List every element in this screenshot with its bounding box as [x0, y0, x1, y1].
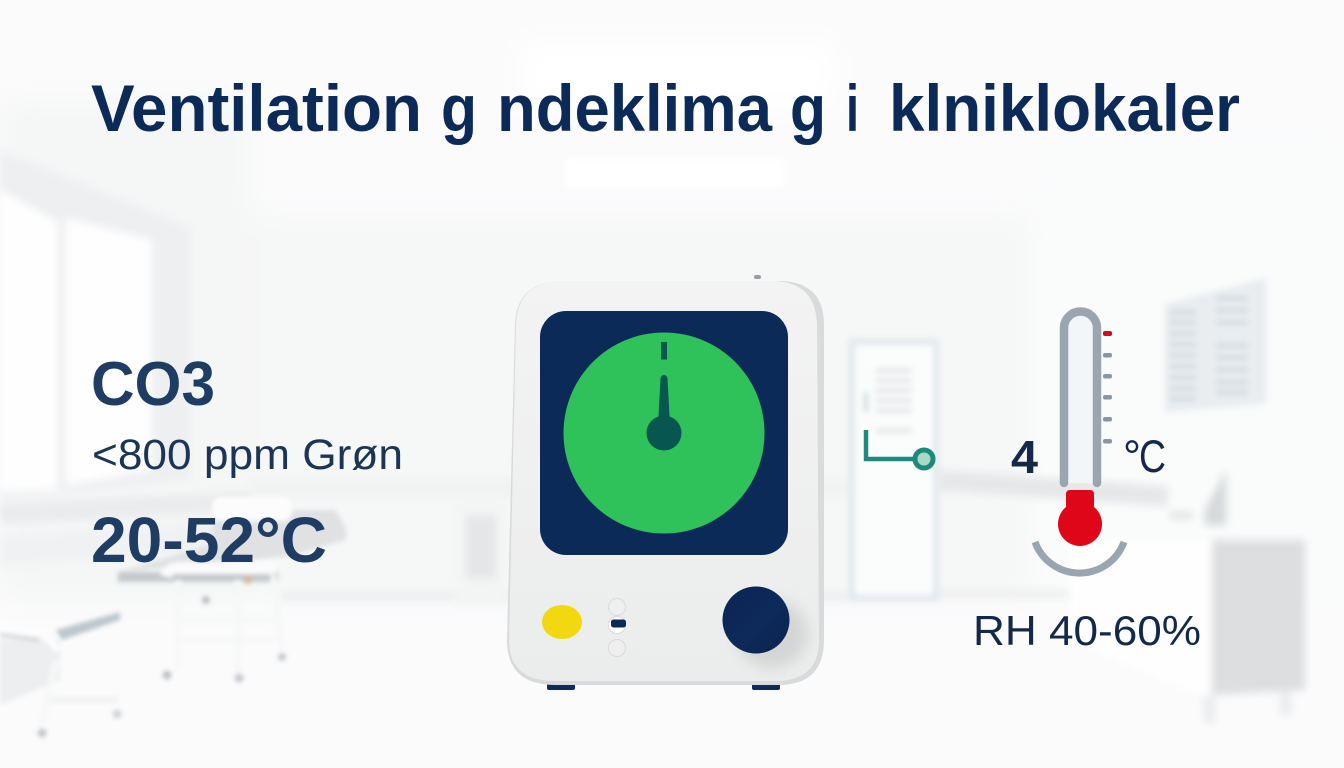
title	[91, 71, 1240, 145]
ceiling light	[565, 158, 785, 188]
thermometer tube	[1064, 312, 1097, 483]
temperature unit: °C: C	[1139, 431, 1166, 482]
gauge tick	[661, 342, 667, 360]
temperature label left: 4: 4	[1011, 431, 1038, 483]
temperature unit: °C	[1123, 431, 1166, 482]
gauge hub	[646, 416, 682, 450]
icon: thermometer	[1035, 312, 1124, 573]
knob shadow	[736, 600, 808, 668]
control knob	[722, 586, 790, 654]
left readings: CO2 and temperature	[91, 350, 403, 576]
title: g	[441, 71, 477, 145]
humidity label: RH 40-60%	[973, 607, 1201, 654]
base arc	[1035, 542, 1124, 573]
yellow indicator light	[542, 605, 582, 639]
wall cupboard at door left	[458, 500, 504, 605]
title: Ventilation	[91, 71, 422, 145]
title: klniklokaler	[889, 71, 1240, 145]
device body	[507, 281, 824, 685]
title: ndeklima	[497, 71, 773, 145]
title: i	[846, 71, 859, 145]
device feet	[547, 683, 780, 690]
status buttons	[608, 598, 626, 656]
scale ticks	[1103, 331, 1112, 444]
foreground chair	[0, 640, 60, 705]
window	[0, 150, 190, 500]
connector line with node	[866, 430, 933, 468]
text: CO2 threshold: <800 ppm Grøn	[92, 431, 403, 479]
back wall rail	[250, 478, 850, 498]
icon: CO2 monitor device	[507, 275, 824, 690]
wall vent	[1165, 278, 1266, 412]
temperature unit: °C: °	[1123, 431, 1141, 482]
door	[852, 342, 936, 598]
gauge needle	[658, 375, 670, 425]
green gauge dial	[564, 332, 764, 534]
device screen	[540, 311, 788, 555]
title: g	[790, 71, 826, 145]
cabinet	[1070, 540, 1212, 700]
heading: CO3: CO3	[91, 350, 215, 419]
text: temperature range: 20-52°C	[91, 504, 327, 576]
examination couch	[118, 510, 346, 572]
red bulb	[1058, 490, 1102, 546]
